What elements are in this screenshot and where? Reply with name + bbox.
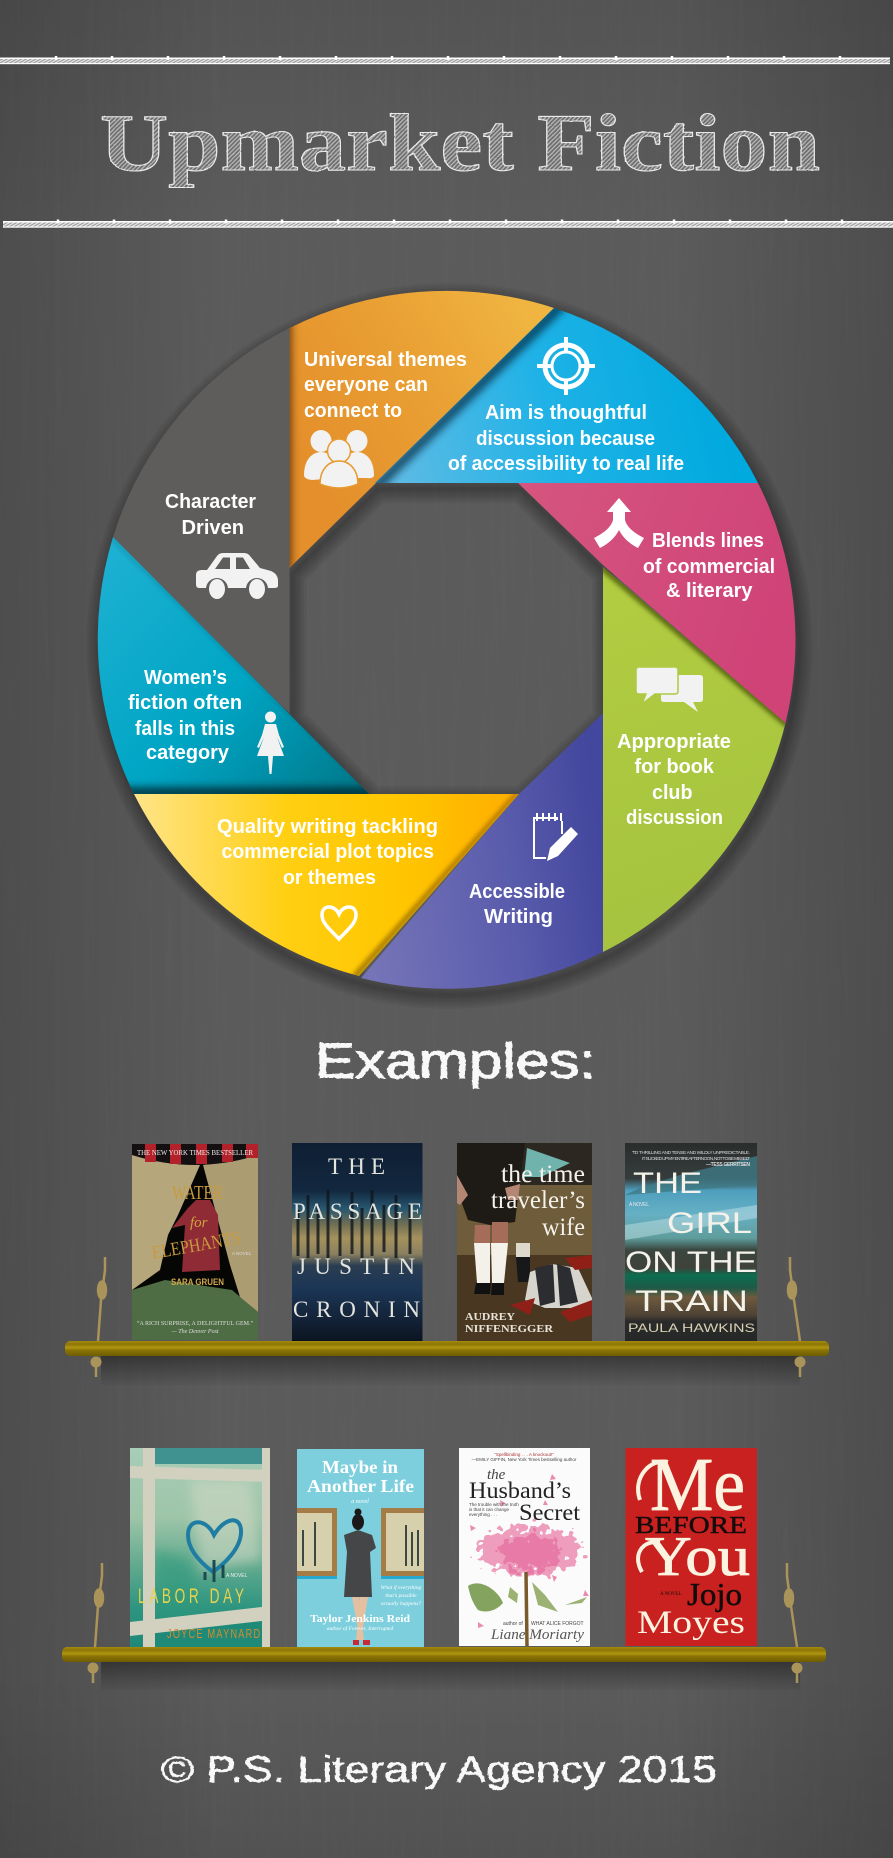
book: The Time Traveler's Wife: the time xyxy=(501,1161,585,1188)
book: Maybe in Another Life: Taylor Jenkins Reid xyxy=(310,1613,410,1625)
icon: merging arrow xyxy=(594,498,644,548)
shelf shadow xyxy=(101,1658,800,1690)
icon: group of people xyxy=(304,430,374,488)
book: The Passage: PASSAGE xyxy=(293,1199,422,1224)
book: Labor Day: LABOR DAY xyxy=(138,1584,244,1608)
book: The Husband's Secret: —EMILY GIFFIN, New York Times bestselling author xyxy=(472,1457,577,1462)
book: The Girl on the Train xyxy=(625,1143,757,1341)
title: Upmarket Fiction xyxy=(100,97,820,188)
book: The Husband's Secret: Liane Moriarty xyxy=(490,1627,584,1643)
heading: examples: Examples: xyxy=(315,1033,596,1089)
left rope xyxy=(92,1257,106,1377)
book: Maybe in Another Life: Maybe in xyxy=(322,1457,398,1477)
right rope xyxy=(786,1563,801,1683)
icon: car xyxy=(196,553,278,600)
book: Maybe in Another Life: that’s possible xyxy=(385,1593,417,1599)
book: The Time Traveler's Wife xyxy=(457,1143,592,1341)
book: Water for Elephants: WATER xyxy=(172,1182,223,1204)
label: quality writing: Quality writing tackling xyxy=(217,816,438,838)
wheel blades xyxy=(98,291,795,989)
label: appropriate for book club: for book xyxy=(634,756,715,778)
book: Labor Day: A NOVEL xyxy=(226,1573,248,1579)
book: Maybe in Another Life xyxy=(297,1449,424,1647)
book: The Passage xyxy=(292,1143,423,1341)
book: Me Before You: Jojo xyxy=(687,1576,742,1612)
book: The Husband's Secret: Husband’s xyxy=(469,1478,571,1503)
blade: quality writing xyxy=(134,790,522,980)
book: The Passage: CRONIN xyxy=(293,1297,420,1322)
book: The Girl on the Train: THE xyxy=(633,1167,702,1200)
shelf shadow xyxy=(101,1352,800,1385)
label: quality writing xyxy=(217,816,438,889)
label: quality writing: commercial plot topics xyxy=(222,841,434,863)
bottom rope divider xyxy=(3,220,893,228)
label: thoughtful discussion: of accessibility to real life xyxy=(448,453,684,475)
book: Water for Elephants: ELEPHANTS xyxy=(150,1228,243,1264)
book: The Husband's Secret: Secret xyxy=(519,1500,581,1525)
label: accessible writing xyxy=(469,881,565,928)
book: Maybe in Another Life: actually happens? xyxy=(381,1601,421,1607)
book: Maybe in Another Life: What if everything xyxy=(381,1584,422,1591)
label: universal themes: everyone can xyxy=(304,374,428,396)
book: Water for Elephants: A NOVEL xyxy=(232,1251,252,1256)
label: women's fiction: Women’s xyxy=(144,667,227,689)
label: appropriate for book club: Appropriate xyxy=(617,731,731,753)
blade: appropriate for book club xyxy=(600,561,790,952)
book: The Husband's Secret: WHAT ALICE FORGOT xyxy=(531,1621,584,1627)
book: The Girl on the Train: A NOVEL xyxy=(629,1202,649,1208)
blade: thoughtful discussion xyxy=(375,308,758,483)
book: The Girl on the Train: “I'D THRILLING AND TENSE AND WILDLY UNPREDICTABLE. xyxy=(632,1150,750,1156)
book: The Girl on the Train: PAULA HAWKINS xyxy=(628,1321,755,1335)
label: character driven xyxy=(165,491,256,539)
book: The Time Traveler's Wife: traveler’s xyxy=(491,1187,585,1214)
right rope xyxy=(788,1257,804,1377)
book: Me Before You: BEFORE xyxy=(635,1513,747,1539)
blade: character driven xyxy=(113,328,290,713)
book: The Husband's Secret: everything . . . xyxy=(469,1512,497,1517)
book: Me Before You: You xyxy=(645,1526,750,1588)
book: The Girl on the Train: TRAIN xyxy=(635,1285,748,1318)
label: women's fiction: category xyxy=(146,742,230,764)
label: character driven: Character xyxy=(165,491,256,513)
blade: blends commercial and literary xyxy=(518,483,795,723)
label: universal themes xyxy=(304,349,467,422)
icon: speech bubbles xyxy=(636,667,703,712)
book: The Husband's Secret xyxy=(459,1448,590,1646)
book: Water for Elephants: THE NEW YORK TIMES BESTSELLER xyxy=(137,1148,253,1157)
book: Me Before You xyxy=(626,1443,757,1646)
label: thoughtful discussion: Aim is thoughtful xyxy=(485,402,647,424)
book: Maybe in Another Life: a novel xyxy=(351,1499,369,1505)
book: Me Before You: Moyes xyxy=(637,1605,745,1641)
label: women's fiction: falls in this xyxy=(135,718,235,740)
book: Water for Elephants: for xyxy=(190,1215,208,1231)
label: blends lines: & literary xyxy=(666,580,753,602)
book: The Husband's Secret: author of xyxy=(503,1621,523,1627)
book: The Time Traveler's Wife: AUDREY xyxy=(465,1312,515,1323)
blade: accessible writing xyxy=(361,713,603,989)
book: Maybe in Another Life: Another Life xyxy=(307,1476,414,1496)
label: accessible writing: Accessible xyxy=(469,881,565,903)
shelf 1 xyxy=(65,1143,829,1385)
book: Water for Elephants: SARA GRUEN xyxy=(171,1277,224,1287)
shelf 2 xyxy=(62,1443,826,1690)
blade: women's fiction xyxy=(98,533,380,799)
label: appropriate for book club: discussion xyxy=(626,807,723,829)
book: Water for Elephants: “A RICH SURPRISE, A DELIGHTFUL GEM.” xyxy=(137,1320,253,1327)
book: Me Before You: Me xyxy=(650,1443,745,1527)
book: The Girl on the Train: GIRL xyxy=(667,1207,752,1240)
label: blends lines xyxy=(643,530,775,602)
wheel cast shadow xyxy=(100,297,798,995)
label: quality writing: or themes xyxy=(283,867,376,889)
book: The Girl on the Train: ON THE xyxy=(625,1246,757,1279)
book: Maybe in Another Life: author of Forever, Interrupted xyxy=(327,1625,393,1632)
label: blends lines: Blends lines xyxy=(652,530,764,552)
label: character driven: Driven xyxy=(182,517,244,539)
label: thoughtful discussion xyxy=(448,402,684,475)
book: Me Before You: A NOVEL xyxy=(660,1592,682,1597)
label: universal themes: connect to xyxy=(304,400,402,422)
book: The Time Traveler's Wife: NIFFENEGGER xyxy=(465,1324,553,1335)
icon: target crosshair xyxy=(537,337,595,395)
label: women's fiction: fiction often xyxy=(128,692,242,714)
shelf board xyxy=(62,1647,826,1662)
icon: woman xyxy=(257,712,284,774)
icon: notepad and pencil xyxy=(534,813,578,861)
aperture wheel chart xyxy=(98,291,799,995)
book: Water for Elephants: — The Denver Post xyxy=(170,1329,219,1335)
book: Labor Day xyxy=(130,1448,270,1647)
book: The Husband's Secret: The trouble with the truth xyxy=(469,1502,519,1507)
book: The Husband's Secret: the xyxy=(487,1467,506,1483)
footer credit: © P.S. Literary Agency 2015 xyxy=(161,1749,717,1790)
book: The Passage: THE xyxy=(328,1154,385,1179)
label: women's fiction xyxy=(128,667,242,764)
label: appropriate for book club xyxy=(617,731,731,829)
book: The Girl on the Train: —TESS GERRITSEN xyxy=(706,1162,750,1168)
label: universal themes: Universal themes xyxy=(304,349,467,371)
shelf board xyxy=(65,1341,829,1356)
book: Water for Elephants xyxy=(132,1144,258,1340)
label: accessible writing: Writing xyxy=(484,906,553,928)
label: blends lines: of commercial xyxy=(643,556,775,578)
book: Labor Day: JOYCE MAYNARD xyxy=(167,1628,260,1641)
book: The Husband's Secret: “Spellbinding . . . A knockout!” xyxy=(494,1452,554,1457)
top rope divider xyxy=(0,56,890,64)
blade: universal themes xyxy=(281,291,554,570)
icon: heart xyxy=(322,907,356,939)
label: thoughtful discussion: discussion because xyxy=(476,428,655,450)
left rope xyxy=(89,1563,102,1683)
label: appropriate for book club: club xyxy=(652,782,692,804)
book: The Girl on the Train: IT SUCKED UP MY ENTIRE AFTERNOON, NOT TO BE MISSED” xyxy=(642,1156,750,1162)
book: The Passage: JUSTIN xyxy=(297,1254,415,1279)
book: The Husband's Secret: is that it can change xyxy=(469,1507,510,1512)
book: The Time Traveler's Wife: wife xyxy=(542,1214,585,1241)
